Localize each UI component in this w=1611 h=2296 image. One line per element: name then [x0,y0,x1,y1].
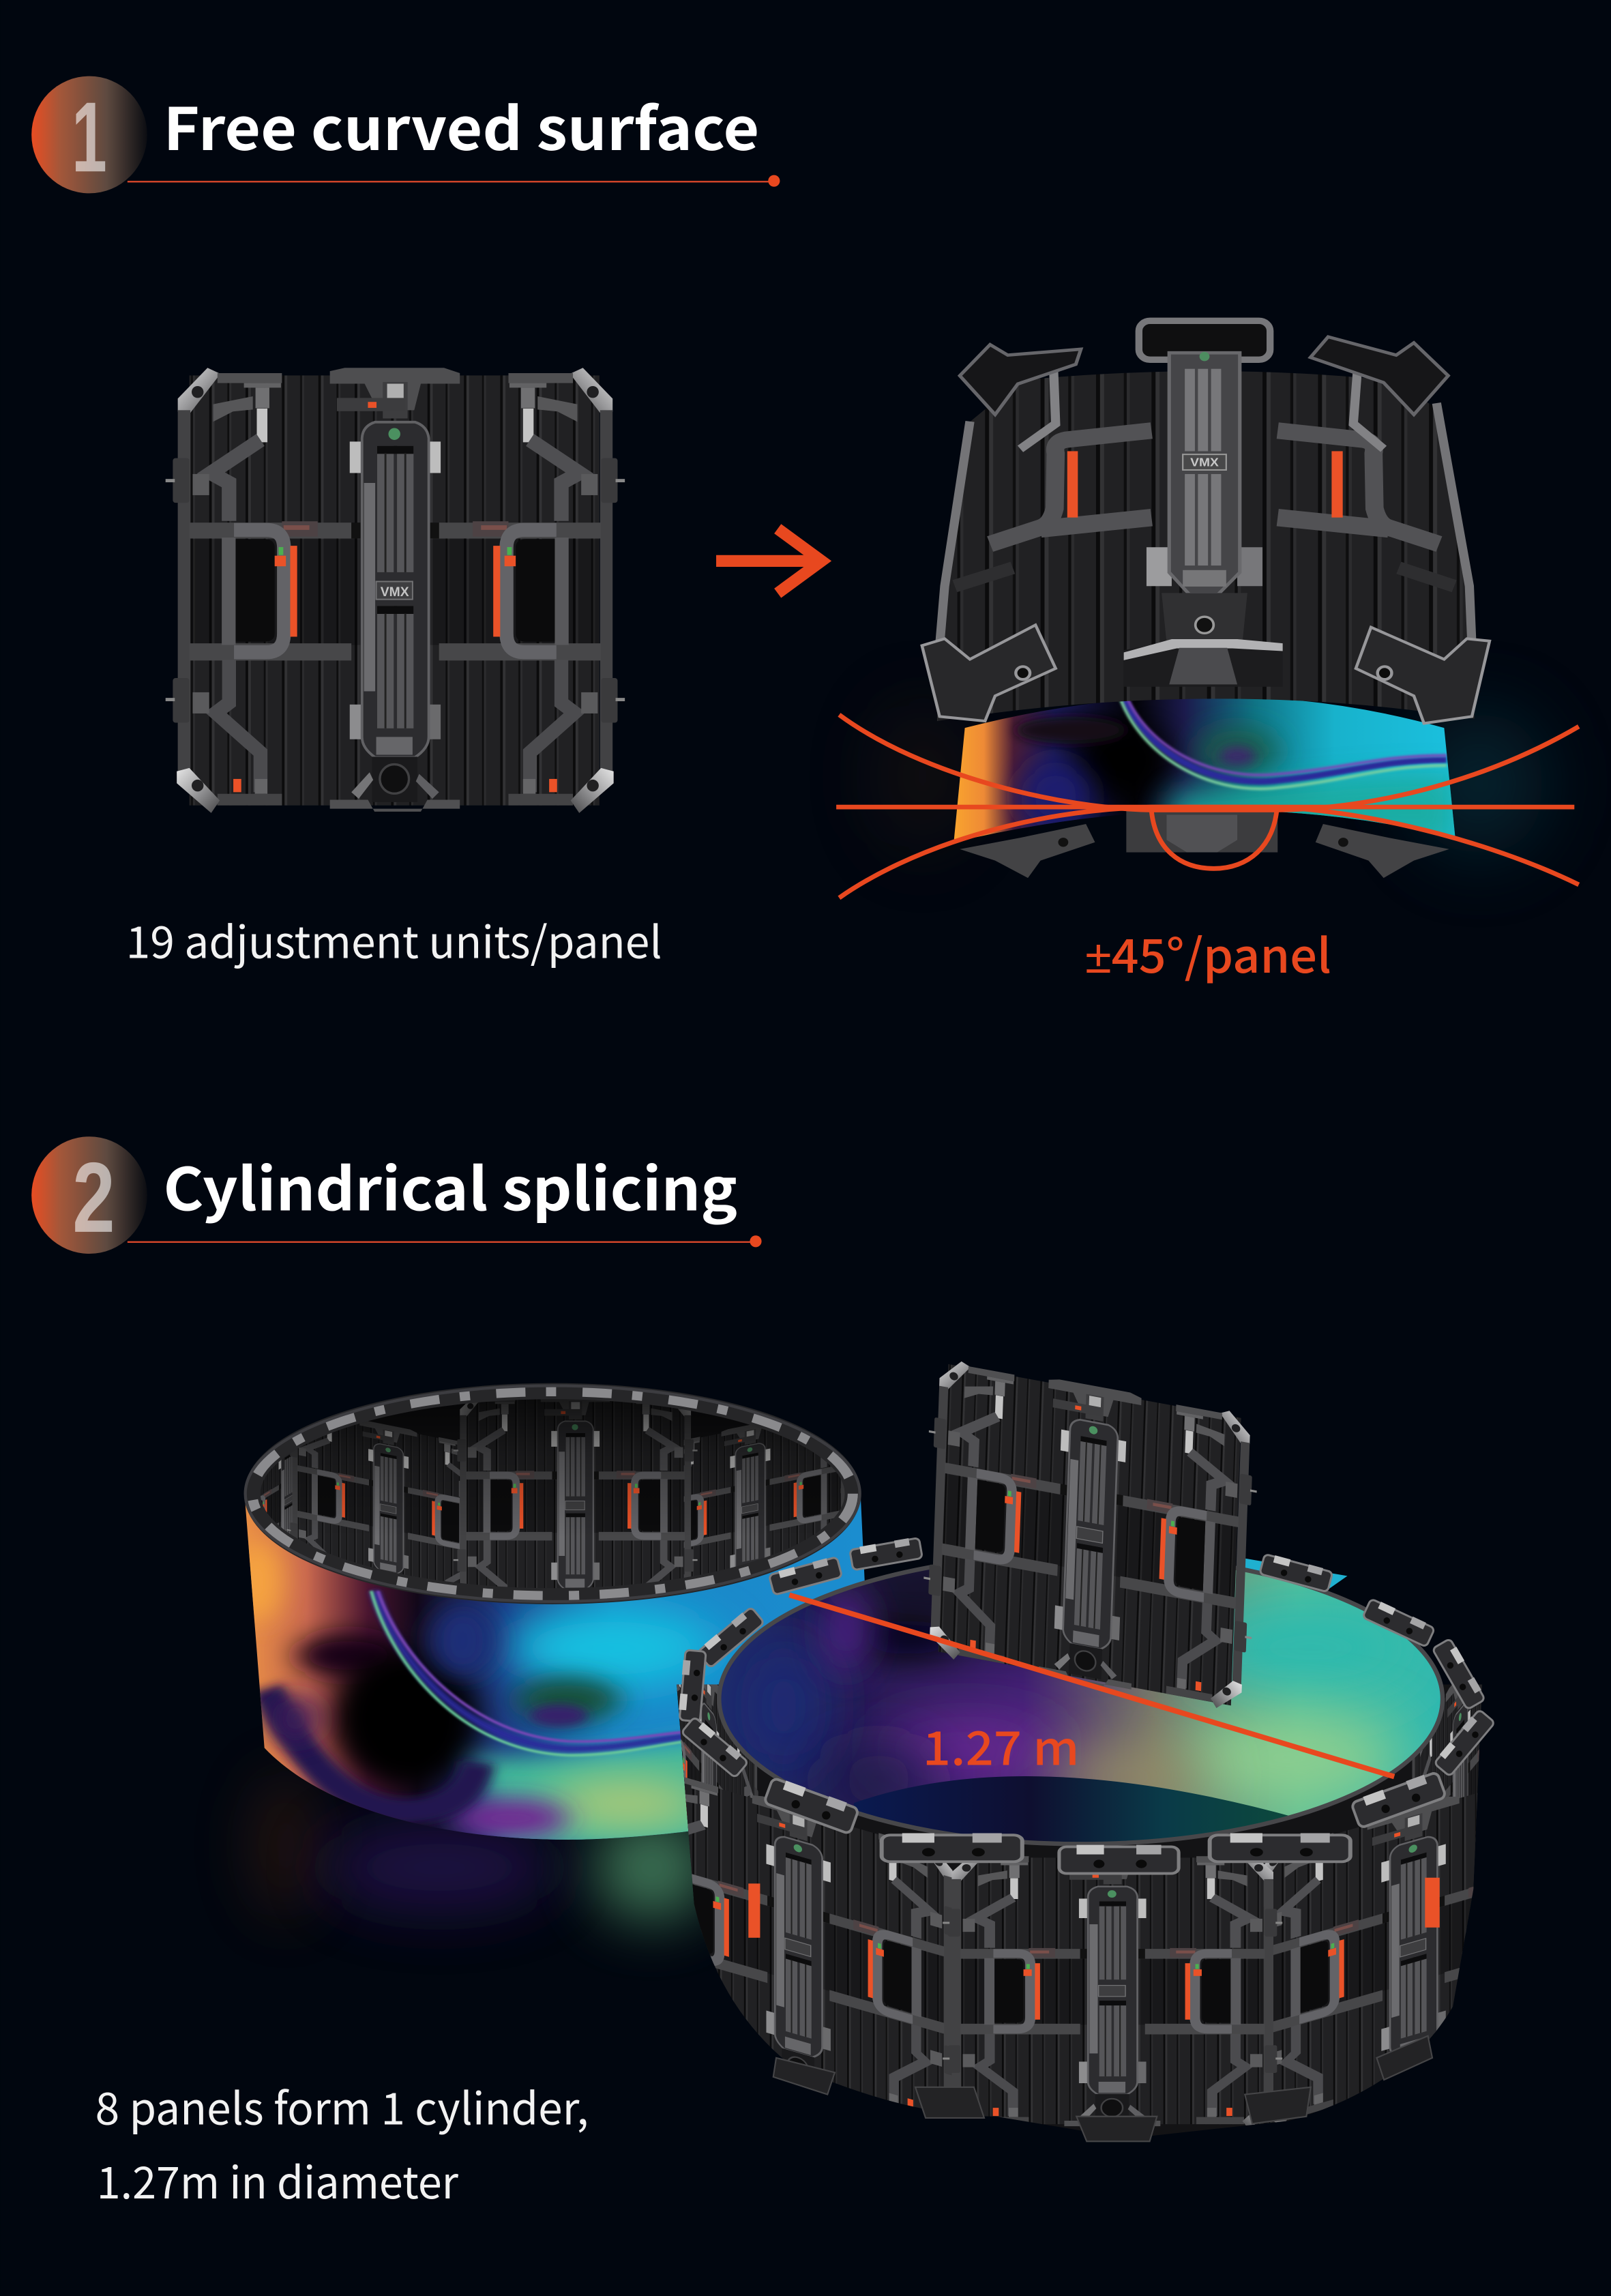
spine logo: VMX [1190,455,1220,469]
heading underline 2 [128,1235,762,1247]
caption: cylinder formation: 8 panels form 1 cylinder, [95,2074,589,2138]
heading: free curved surface: Free curved surface [163,82,759,167]
top clamps [960,337,1448,415]
inner screen surface [722,1570,1440,1842]
arrow [716,529,822,593]
handles and arms [940,357,1472,645]
rim brackets [678,1536,1495,1874]
caption: angle per panel: ±45°/panel [1085,918,1331,986]
inner floor crescent [854,1776,1288,1842]
curved panel with screen [836,321,1579,898]
number badge 1 [31,76,147,193]
heading: cylindrical splicing: Cylindrical splicing [163,1143,737,1228]
cylinder with panels outside [677,1537,1494,2142]
orange handles [1067,451,1343,518]
lower corner brackets [922,625,1490,723]
floor reflection [250,1772,710,1920]
connector brackets below screen [960,810,1449,878]
panel logo: VMX [381,585,409,600]
flat LED panel rear view [166,368,625,813]
section header 1 [31,76,780,193]
number badge 2 [31,1136,147,1254]
central spine [1139,321,1270,643]
blue wall glimpse [1245,1559,1347,1611]
lower centre bracket [1124,639,1283,687]
number badge 2: 2 [72,1142,115,1253]
section header 2 [31,1136,762,1254]
bottom clips [773,2036,1432,2141]
outer iridescent surface [246,1499,865,1840]
screen glows [878,703,1545,857]
cylinder with screen outside [233,1384,884,1920]
diameter line [789,1595,1394,1777]
caption: cylinder formation [95,2074,589,2211]
heading underline 1 [128,175,780,187]
caption: cylinder formation: 1.27m in diameter [97,2147,459,2211]
diameter label: 1.27 m [923,1710,1080,1778]
angle lines [836,715,1579,898]
top rim [246,1385,860,1602]
rim edge [719,1554,1443,1844]
standing panel [921,1356,1260,1714]
number badge 1: 1 [72,81,107,192]
outer body [677,1684,1482,2136]
side orange bars [748,1878,1440,1938]
interior panels [261,1399,845,1588]
panel back [937,371,1475,721]
caption: adjustment units: 19 adjustment units/panel [126,907,662,971]
curved screen image [954,698,1455,839]
